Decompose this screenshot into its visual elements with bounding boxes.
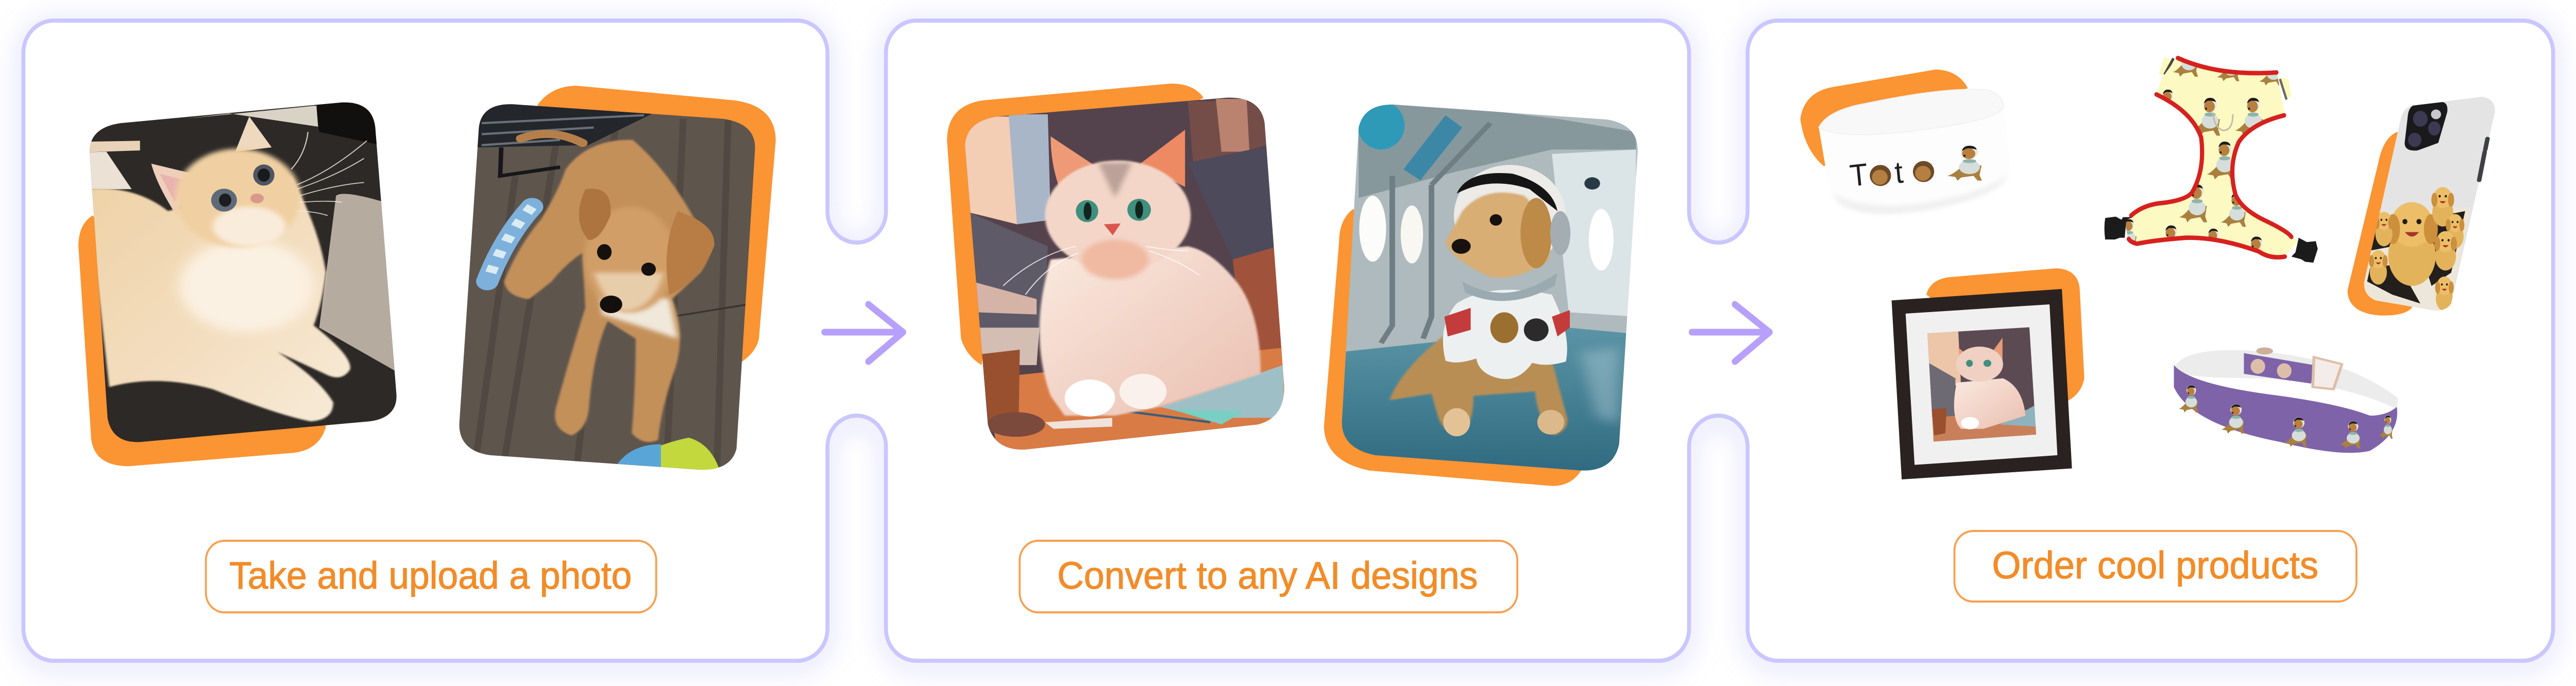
panel: step 2 convert to AI designs [947, 83, 1647, 612]
arrow: step 2 to step 3 [1692, 304, 1770, 362]
label: Order cool products: Order cool products [1992, 544, 2318, 587]
product: pet bowl with name Toto: T [1849, 157, 1870, 193]
panel: step 3 order cool products [1800, 42, 2495, 602]
label: Take and upload a photo [206, 541, 656, 612]
product: purple dog collar [2174, 348, 2398, 453]
AI image card: astronaut puppy with orange backing [1324, 101, 1647, 486]
photo card: puppy with orange backing [448, 86, 776, 479]
product: pet bowl with name Toto: t [1893, 155, 1905, 190]
product: pet bowl with name Toto [1800, 70, 2010, 214]
label: Take and upload a photo: Take and upload a photo [229, 555, 632, 597]
panel: step 1 take and upload a photo [78, 86, 776, 612]
product: dog harness [2105, 42, 2318, 270]
arrow: step 1 to step 2 [824, 304, 903, 362]
product: framed cat print [1892, 268, 2084, 479]
label: Order cool products [1955, 531, 2357, 602]
AI image card: illustrated cat with orange backing [947, 83, 1294, 457]
label: Convert to any AI designs: Convert to any AI designs [1057, 555, 1478, 597]
product: phone case [2348, 97, 2495, 316]
label: Convert to any AI designs [1020, 541, 1517, 612]
photo card: cat with orange backing [78, 97, 409, 466]
